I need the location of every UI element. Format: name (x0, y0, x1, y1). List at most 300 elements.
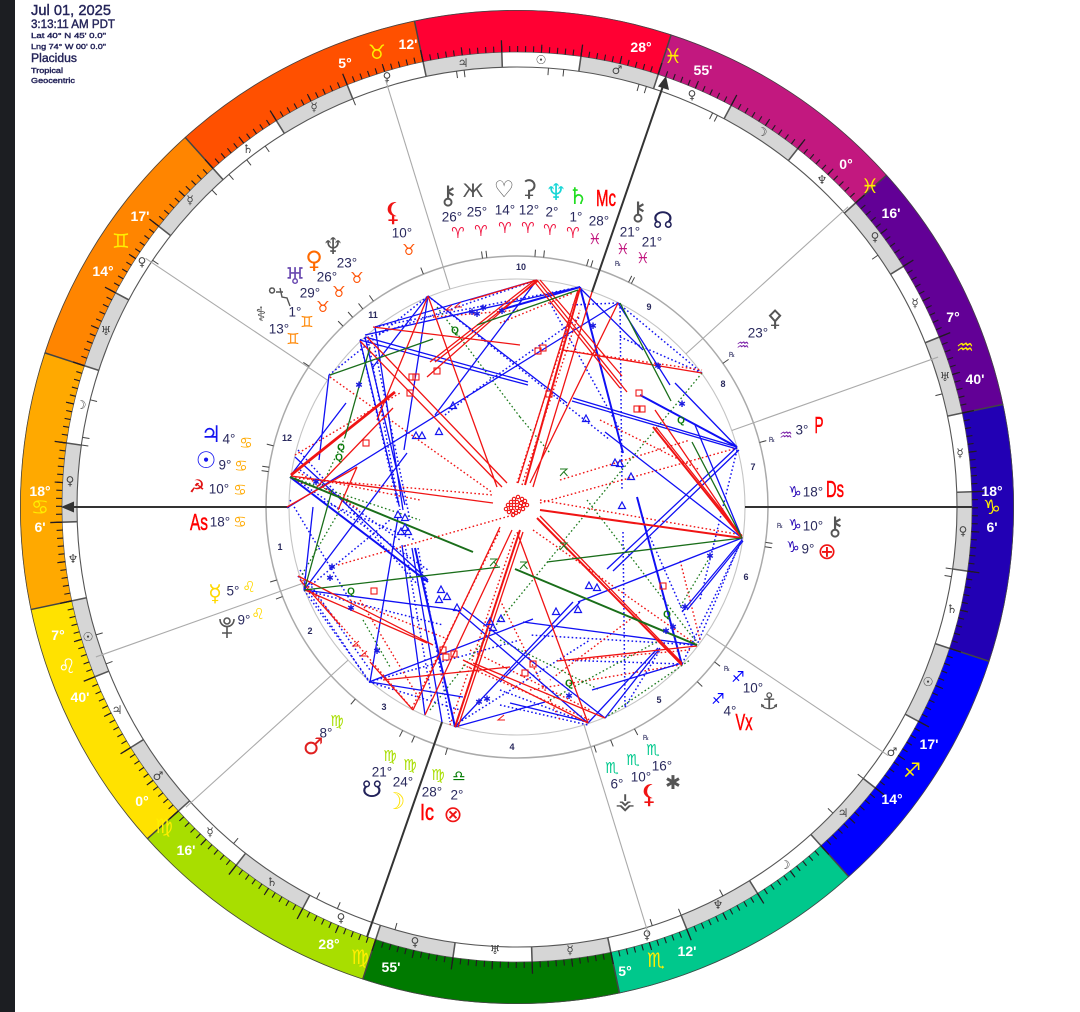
label: serpent asteroid 13 Gemini: ♊ (286, 330, 300, 348)
aspect glyphs: sextiles: ✱ (498, 307, 506, 317)
label: Descendant 18 Capricorn: Ds (826, 476, 844, 502)
label: Chiron 26 Aries: ♈ (451, 224, 465, 242)
label: asteroid 25 Aries: Ж (463, 180, 484, 202)
label: Vesta 6 Scorpio: 6° (611, 776, 623, 792)
decan ruler glyphs: ☿ (956, 446, 964, 460)
house numbers: 5 (656, 695, 662, 705)
cusp label: 0 Virgo 16: ♍ (155, 814, 173, 838)
cusp label: 0 Pisces 16: 16' (882, 205, 900, 221)
label: star point 16 Scorpio: ℞ (643, 734, 649, 742)
label: North Node 21 Pisces (636, 208, 673, 267)
decan ruler glyphs: ♀ (688, 88, 696, 102)
cusp label: 18 Cancer 6: 18° (29, 483, 51, 499)
cusp label: 18 Cancer 6: ♋ (31, 495, 49, 519)
aspect glyphs: quintiles: Q (335, 452, 343, 464)
cusp label: 7 Leo 40 (51, 627, 89, 705)
cusp label: 18 Capricorn 6: ♑ (983, 495, 1001, 519)
label: Saturn 1 Aries (566, 184, 588, 242)
label: Imum Coeli 28 Virgo: 28° (422, 784, 442, 800)
house numbers: 2 (307, 626, 313, 636)
label: asteroid 25 Aries: 25° (467, 204, 487, 220)
decan ruler glyphs: ☿ (310, 100, 318, 114)
house numbers: 1 (277, 542, 283, 552)
decan ruler glyphs: ♄ (947, 602, 957, 616)
label: Part of Spirit 2 Libra: ♎ (452, 767, 466, 785)
cusp label: 14 Gemini 17: 14° (92, 263, 114, 279)
label: Eros 14 Aries: ♈ (498, 219, 512, 237)
label: Pluto 9 Leo: ♌ (251, 605, 265, 623)
label: Chiron-like 21 Pisces: 21° (620, 224, 640, 240)
label: asteroid 1 Gemini (270, 288, 314, 331)
cusp label: 7 Aquarius 40: 7° (946, 309, 960, 325)
label: Venus 26 Taurus: 26° (317, 270, 337, 284)
label: Part of Spirit 2 Libra (443, 767, 466, 828)
cusp label: 28 Pisces 55: 28° (630, 39, 652, 55)
label: serpent asteroid 13 Gemini (256, 302, 300, 348)
label: Imum Coeli 28 Virgo (420, 766, 445, 825)
decan ruler glyphs: ♄ (243, 142, 253, 156)
label: Sun 9 Cancer: ☉ (196, 448, 216, 474)
cusp label: 0 Pisces 16: ♓ (861, 174, 879, 198)
decan ruler glyphs: ☉ (923, 675, 933, 689)
aspect glyphs: sextiles: ✱ (589, 322, 597, 332)
chart header information: Lng 74° W 00' 0.0" (31, 42, 106, 51)
decan ruler glyphs: ♆ (713, 898, 723, 912)
cusp label: 5 Scorpio 12: 5° (618, 963, 632, 979)
label: Vesta 6 Scorpio (605, 759, 635, 815)
label: serpent asteroid 13 Gemini: 13° (269, 322, 289, 336)
label: Ascendant 18 Cancer: 18° (210, 514, 230, 530)
label: Midheaven 28 Pisces: 28° (589, 214, 609, 228)
aspect glyphs: sextiles: ✱ (654, 362, 662, 372)
cusp label: 28 Virgo 55: 55' (382, 959, 400, 975)
label: asteroid 25 Aries: ♈ (474, 222, 488, 240)
cusp label: 5 Scorpio 12 (618, 943, 696, 979)
label: asteroid 1 Gemini: ♊ (300, 313, 314, 331)
dotted green aspects (290, 307, 710, 718)
aspect glyphs: quintiles: Q (663, 610, 671, 620)
aspect glyphs: sextiles: ✱ (678, 400, 686, 410)
cusp label: 14 Sagittarius 17: 17' (920, 736, 938, 752)
decan ruler glyphs: ♅ (490, 943, 500, 957)
label: Vesta 6 Scorpio: ♏ (605, 759, 619, 777)
label: Vertex 4 Sagittarius: Vx (736, 709, 753, 735)
label: Ceres 12 Aries (519, 176, 539, 237)
decan ruler glyphs: ☿ (206, 825, 214, 839)
dotted blue aspects (290, 280, 742, 725)
label: Neptune 2 Aries (543, 180, 566, 239)
aspect glyphs: quintiles (335, 326, 685, 690)
cusp label: 7 Leo 40: 7° (51, 627, 65, 643)
label: Selena 10 Taurus: ⚸ (383, 198, 403, 228)
house numbers (277, 262, 756, 752)
decan ruler glyphs: ☿ (186, 193, 194, 207)
label: Mercury 5 Leo (208, 578, 256, 607)
label: Lilith 10 Scorpio: 10° (631, 770, 651, 784)
cusp label: 5 Scorpio 12: ♏ (647, 948, 665, 972)
decan ruler glyphs: ☿ (911, 296, 919, 310)
cusp label: 0 Virgo 16 (135, 793, 195, 858)
decan ruler glyphs: ♃ (458, 56, 468, 70)
central conjunction cluster (504, 495, 529, 517)
aspect glyphs: quintiles: Q (565, 678, 573, 690)
cusp label: 5 Taurus 12: 12' (399, 36, 417, 52)
label: Uranus 29 Taurus: 29° (300, 286, 320, 300)
cusp label: 28 Virgo 55 (318, 936, 400, 975)
chart header information (31, 3, 115, 85)
aspect glyphs: squares (363, 345, 666, 676)
decan ruler glyphs: ♀ (337, 911, 345, 925)
decan ruler glyphs: ☽ (757, 125, 767, 139)
decan ruler glyphs: ♀ (871, 230, 879, 244)
label: Ascendant 18 Cancer: As (190, 509, 208, 535)
label: Ceres 12 Aries: ⚳ (521, 176, 537, 202)
cusp label: 7 Leo 40: 40' (71, 689, 89, 705)
label: Eros 14 Aries: ♡ (494, 177, 514, 203)
chart header information: Jul 01, 2025 (31, 3, 111, 19)
decan ruler glyphs: ♅ (101, 324, 111, 338)
aspect glyphs: sextiles: ✱ (483, 695, 491, 705)
label: Pluto 9 Leo (220, 605, 265, 638)
label: Pluto 3 Aquarius (769, 412, 824, 444)
aspect glyphs: sextiles: ✱ (347, 604, 355, 614)
label: Pluto 9 Leo: 9° (238, 612, 250, 628)
aspect glyphs: sextiles: ✱ (706, 552, 714, 562)
label: Jupiter 4 Cancer (201, 422, 253, 452)
decan ruler glyphs: ☽ (76, 398, 86, 412)
label: Selena 10 Taurus: ♉ (402, 241, 416, 259)
cusp label: 18 Capricorn 6: 18° (981, 483, 1003, 499)
label: Moon 24 Virgo: ☽ (385, 789, 405, 815)
label: Black Moon 10 Cancer: 10° (209, 482, 229, 496)
label: Mars 8 Virgo: 8° (320, 726, 332, 740)
decan ruler glyphs: ♂ (153, 769, 163, 783)
label: Mars 8 Virgo (303, 712, 344, 760)
decan ruler glyphs: ♆ (68, 552, 78, 566)
label: Part of Spirit 2 Libra: ⊗ (443, 802, 463, 828)
cusp label: 7 Aquarius 40 (946, 309, 984, 387)
house numbers: 9 (646, 302, 652, 312)
label: Vertex 4 Sagittarius: 4° (724, 704, 736, 718)
cusp label: 5 Taurus 12: ♉ (368, 40, 386, 64)
label: Ceres 12 Aries: ♈ (521, 219, 535, 237)
label: Selena 10 Taurus: 10° (392, 226, 412, 240)
decan ruler glyphs: ♀ (66, 474, 74, 488)
heavy blue aspects (290, 287, 737, 727)
decan ruler glyphs: ♀ (411, 935, 419, 949)
label: Sun 9 Cancer: 9° (219, 458, 231, 472)
label: Black Moon 10 Cancer (189, 476, 247, 499)
cusp label: 0 Pisces 16 (839, 156, 900, 221)
label: South Node 21 Virgo (362, 747, 397, 803)
label: Pallas 23 Aquarius: ⚴ (767, 306, 783, 332)
label: Part of Spirit 2 Libra: 2° (451, 788, 463, 802)
cusp label: 0 Virgo 16: 16' (177, 842, 195, 858)
label: Midheaven 28 Pisces: Mc (596, 185, 616, 211)
label: Neptune 2 Aries: ♆ (546, 180, 566, 206)
aspect glyphs: sextiles: ✱ (479, 304, 487, 314)
cusp label: 14 Gemini 17: 17' (131, 208, 149, 224)
label: anchor point 10 Sagittarius: ℞ (724, 665, 730, 673)
label: South Node 21 Virgo: ♍ (383, 747, 397, 765)
label: Vesta 6 Scorpio: ⚶ (615, 789, 635, 815)
label: Venus 26 Taurus (305, 246, 346, 301)
chart header information: Lat 40° N 45' 0.0" (31, 31, 106, 40)
label: star point 16 Scorpio: ♏ (646, 741, 660, 759)
label: Jupiter 4 Cancer: ♋ (239, 434, 253, 452)
solid blue aspects (287, 280, 743, 727)
cusp label: 7 Aquarius 40: ♒ (956, 335, 974, 359)
label: Lilith 10 Scorpio: ♏ (626, 751, 640, 769)
label: Moon 24 Virgo (385, 756, 417, 815)
label: Saturn 1 Aries: ♄ (568, 184, 588, 210)
label: Neptune 2 Aries: 2° (546, 204, 558, 220)
aspect glyphs: quintiles: Q (677, 416, 685, 426)
aspect glyphs: sextiles: ✱ (473, 310, 481, 320)
label: Chiron 10 Capricorn: ⚷ (825, 512, 845, 542)
label: anchor point 10 Sagittarius: 10° (743, 680, 763, 696)
aspect glyphs: sextiles: ✱ (475, 698, 483, 708)
label: Venus 26 Taurus: ♉ (332, 283, 346, 301)
label: Midheaven 28 Pisces (588, 185, 616, 248)
label: Jupiter 4 Cancer: ♃ (201, 422, 221, 448)
label: Pallas 23 Aquarius: ℞ (729, 351, 735, 359)
label: Mars 8 Virgo: ♍ (330, 712, 344, 730)
decan ruler glyphs: ♄ (267, 875, 277, 889)
label: Sun 9 Cancer (196, 448, 248, 475)
label: Descendant 18 Capricorn: 18° (803, 484, 823, 500)
cusp label: 18 Capricorn 6 (981, 483, 1003, 535)
label: Part of Fortune 9 Capricorn (786, 538, 837, 565)
cusp label: 14 Sagittarius 17 (881, 736, 938, 807)
aspect glyphs: sextiles (312, 304, 714, 708)
aspect glyphs: trines (394, 402, 634, 630)
cusp label: 7 Aquarius 40: 40' (966, 371, 984, 387)
label: Neptune 2 Aries: ♈ (543, 221, 557, 239)
label: Lilith 10 Scorpio (626, 751, 659, 810)
decan ruler glyphs: ♂ (887, 745, 897, 759)
label: Pluto 3 Aquarius: 3° (796, 422, 808, 438)
cusp label: 14 Gemini 17: ♊ (112, 229, 130, 253)
cusp label: 0 Pisces 16: 0° (839, 156, 853, 172)
cusp label: 7 Leo 40: ♌ (58, 654, 76, 678)
label: Mercury 5 Leo: 5° (227, 584, 239, 598)
aspect glyphs: sextiles: ✱ (565, 692, 573, 702)
label: star point 16 Scorpio (643, 734, 681, 794)
label: Chiron 10 Capricorn: ℞ (777, 522, 783, 530)
chart header information: Tropical (31, 66, 63, 75)
decan ruler glyphs: ♀ (138, 255, 146, 269)
label: anchor point 10 Sagittarius: ⚓ (759, 689, 779, 715)
label: Part of Fortune 9 Capricorn: ♑ (786, 538, 800, 556)
cusp label: 28 Virgo 55: ♍ (351, 945, 369, 969)
aspect lines (287, 280, 743, 727)
label: Uranus 29 Taurus: ♅ (285, 264, 305, 290)
label: Uranus 29 Taurus: ♉ (316, 298, 330, 316)
cusp label: 28 Pisces 55 (630, 39, 712, 78)
inner house circles (266, 256, 768, 758)
label: Vertex 4 Sagittarius: ♐ (711, 690, 725, 708)
decan ruler glyphs: ♆ (817, 173, 827, 187)
label: Chiron 26 Aries (438, 181, 465, 242)
cusp label: 5 Taurus 12: 5° (338, 55, 352, 71)
label: Neptune 23 Taurus: ♉ (350, 269, 364, 287)
label: Chiron-like 21 Pisces (615, 197, 648, 268)
decan ruler glyphs: ♀ (643, 928, 651, 942)
label: Imum Coeli 28 Virgo: Ic (420, 799, 434, 825)
aspect glyphs: quincunx and semisquare (353, 302, 568, 720)
label: Eros 14 Aries (494, 177, 515, 237)
decan ruler glyphs: ♀ (383, 70, 391, 84)
label: asteroid 25 Aries (463, 180, 488, 240)
cusp label: 18 Cancer 6: 6' (34, 519, 46, 535)
decan ruler glyphs: ♂ (612, 63, 622, 77)
label: star point 16 Scorpio: ✱ (665, 772, 681, 794)
label: Pluto 3 Aquarius: ♒ (779, 426, 793, 444)
label: Black Moon 10 Cancer: ♋ (233, 481, 247, 499)
label: Moon 24 Virgo: ♍ (403, 756, 417, 774)
label: Pallas 23 Aquarius: ♒ (736, 336, 750, 354)
label: Chiron 10 Capricorn (777, 512, 845, 542)
label: Mercury 5 Leo: ♌ (242, 578, 256, 596)
house numbers: 4 (509, 742, 515, 752)
heavy red aspects (455, 288, 742, 727)
label: Ceres 12 Aries: 12° (519, 202, 539, 218)
label: serpent asteroid 13 Gemini: ⚕ (256, 302, 266, 326)
aspect glyphs: quintiles: Q (347, 586, 355, 598)
label: Chiron 26 Aries: ⚷ (438, 181, 458, 211)
label: Pluto 3 Aquarius: ℞ (769, 436, 775, 444)
aspect glyphs: sextiles: ✱ (373, 647, 381, 657)
heavy green aspects (290, 477, 697, 645)
cusp label: 18 Capricorn 6: 6' (986, 519, 998, 535)
cusp label: 5 Taurus 12 (338, 36, 417, 71)
label: Saturn 1 Aries: 1° (570, 210, 582, 224)
cusp label: 28 Virgo 55: 28° (318, 936, 340, 952)
decan ruler glyphs: ☉ (536, 53, 546, 67)
aspect glyphs: sextiles: ✱ (355, 381, 363, 391)
label: Descendant 18 Capricorn (788, 476, 844, 502)
label: Pluto 3 Aquarius: P (814, 412, 824, 438)
label: Pallas 23 Aquarius (729, 306, 783, 359)
label: South Node 21 Virgo: ☋ (362, 777, 382, 803)
cusp label: 14 Sagittarius 17: ♐ (903, 758, 921, 782)
label: Lilith 10 Scorpio: ⚸ (639, 780, 659, 810)
angle axes with arrows (61, 76, 972, 937)
cusp label: 0 Virgo 16: 0° (135, 793, 149, 809)
cusp label: 18 Cancer 6 (29, 483, 51, 535)
decan ruler glyphs: ♀ (959, 524, 967, 538)
label: Part of Fortune 9 Capricorn: ⊕ (817, 539, 837, 565)
degree ticks (56, 46, 978, 968)
aspect glyphs: sextiles: ✱ (326, 574, 334, 584)
label: anchor point 10 Sagittarius: ♐ (731, 668, 745, 686)
label: Selena 10 Taurus (383, 198, 416, 259)
house numbers: 12 (282, 433, 292, 443)
label: Venus 26 Taurus: ♀ (305, 246, 323, 274)
label: Mars 8 Virgo: ♂ (303, 734, 323, 760)
house numbers: 11 (368, 310, 378, 320)
label: Neptune 23 Taurus: ♆ (323, 234, 343, 260)
aspect glyphs: sextiles: ✱ (662, 627, 670, 637)
window edge bar (0, 0, 15, 1012)
cusp label: 5 Scorpio 12: 12' (678, 943, 696, 959)
solid red aspects (287, 280, 742, 727)
decan ruler glyphs: ♅ (940, 370, 950, 384)
aspect glyphs: sextiles: ✱ (669, 623, 677, 633)
label: Ascendant 18 Cancer (190, 509, 247, 535)
chart header information: Placidus (31, 53, 77, 65)
dotted red aspects (294, 293, 742, 725)
aspect glyphs: sextiles: ✱ (328, 563, 336, 573)
planet position ticks (81, 68, 953, 930)
cusp label: 14 Sagittarius 17: 14° (881, 791, 903, 807)
label: Eros 14 Aries: 14° (495, 202, 515, 218)
decan ruler glyphs: ☉ (83, 630, 93, 644)
label: Chiron 10 Capricorn: ♑ (788, 516, 802, 534)
label: Jupiter 4 Cancer: 4° (223, 432, 235, 446)
decan ruler glyphs: ☽ (780, 858, 790, 872)
label: North Node 21 Pisces: 21° (642, 234, 662, 250)
label: Uranus 29 Taurus (285, 264, 330, 316)
aspect glyphs: quintiles: Q (451, 326, 459, 336)
aspect glyphs: sextiles: ✱ (312, 478, 320, 488)
label: Part of Fortune 9 Capricorn: 9° (802, 542, 814, 556)
label: Ascendant 18 Cancer: ♋ (233, 513, 247, 531)
thick red conjunction line (291, 392, 395, 475)
house numbers: 3 (381, 702, 387, 712)
label: Pallas 23 Aquarius: 23° (748, 326, 768, 340)
label: Saturn 1 Aries: ♈ (566, 224, 580, 242)
label: Chiron-like 21 Pisces: ℞ (615, 260, 621, 268)
decan ruler glyphs: ♃ (838, 806, 848, 820)
label: Sun 9 Cancer: ♋ (234, 457, 248, 475)
house numbers: 7 (750, 462, 756, 472)
label: asteroid 1 Gemini: 1° (289, 304, 301, 320)
aspect glyphs: sextiles: ✱ (681, 603, 689, 613)
label: Chiron 26 Aries: 26° (442, 210, 462, 224)
label: Chiron 10 Capricorn: 10° (803, 518, 823, 534)
label: star point 16 Scorpio: 16° (652, 758, 672, 774)
label: Chiron-like 21 Pisces: ♓ (616, 240, 630, 258)
label: Moon 24 Virgo: 24° (393, 774, 413, 790)
label: Neptune 23 Taurus: 23° (337, 256, 357, 270)
cusp label: 28 Pisces 55: ♓ (664, 44, 682, 68)
decan ruler glyphs: ☿ (566, 943, 574, 957)
solid green aspects (304, 290, 742, 590)
chart header information: Geocentric (31, 76, 75, 85)
label: South Node 21 Virgo: 21° (372, 764, 392, 780)
label: Imum Coeli 28 Virgo: ♍ (431, 766, 445, 784)
house numbers: 10 (516, 262, 526, 272)
label: Chiron-like 21 Pisces: ⚷ (628, 197, 648, 227)
label: Mercury 5 Leo: ☿ (208, 581, 222, 607)
cusp label: 28 Pisces 55: 55' (694, 62, 712, 78)
chart header information: 3:13:11 AM PDT (31, 19, 115, 31)
label: North Node 21 Pisces: ♓ (636, 249, 650, 267)
label: Descendant 18 Capricorn: ♑ (788, 483, 802, 501)
house numbers: 6 (743, 572, 749, 582)
label: Midheaven 28 Pisces: ♓ (588, 230, 602, 248)
label: Vertex 4 Sagittarius (711, 690, 753, 735)
aspect glyphs: quintiles: Q (337, 442, 345, 454)
label: Black Moon 10 Cancer: ☭ (189, 476, 205, 498)
label: North Node 21 Pisces: ☊ (653, 208, 673, 234)
house numbers: 8 (720, 379, 726, 389)
aspect glyphs: sextiles: ✱ (468, 308, 476, 318)
label: Neptune 23 Taurus (323, 234, 364, 287)
cusp label: 14 Gemini 17 (92, 208, 149, 279)
